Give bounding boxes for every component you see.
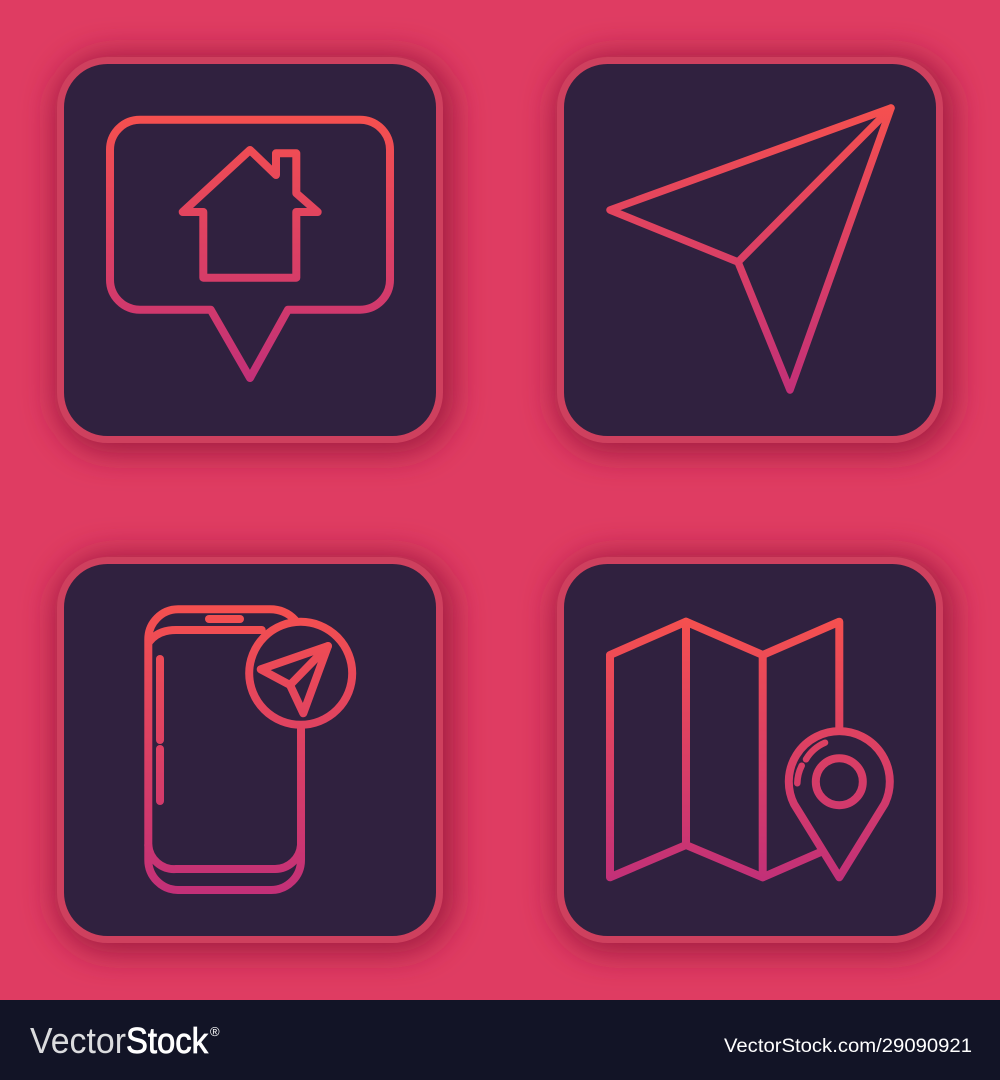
panel: navigation arrow [555,55,953,453]
image id text: VectorStock.com/29090921 [724,1035,972,1057]
icon: paper plane arrow [610,108,891,390]
logo: VectorStock: Stock [126,1020,209,1061]
logo: VectorStock [30,1020,209,1061]
icon: smartphone with arrow badge [148,609,352,890]
panel: smartphone with navigation [55,555,453,953]
registered mark: ® [210,1024,220,1039]
icon: folded map and location pin [610,622,890,877]
panel: folded map with pin [555,555,953,953]
icon: speech bubble with house [110,120,390,378]
panel: home location bubble [55,55,453,453]
logo: VectorStock: Vector [30,1020,126,1061]
footer bar [0,1000,1000,1080]
